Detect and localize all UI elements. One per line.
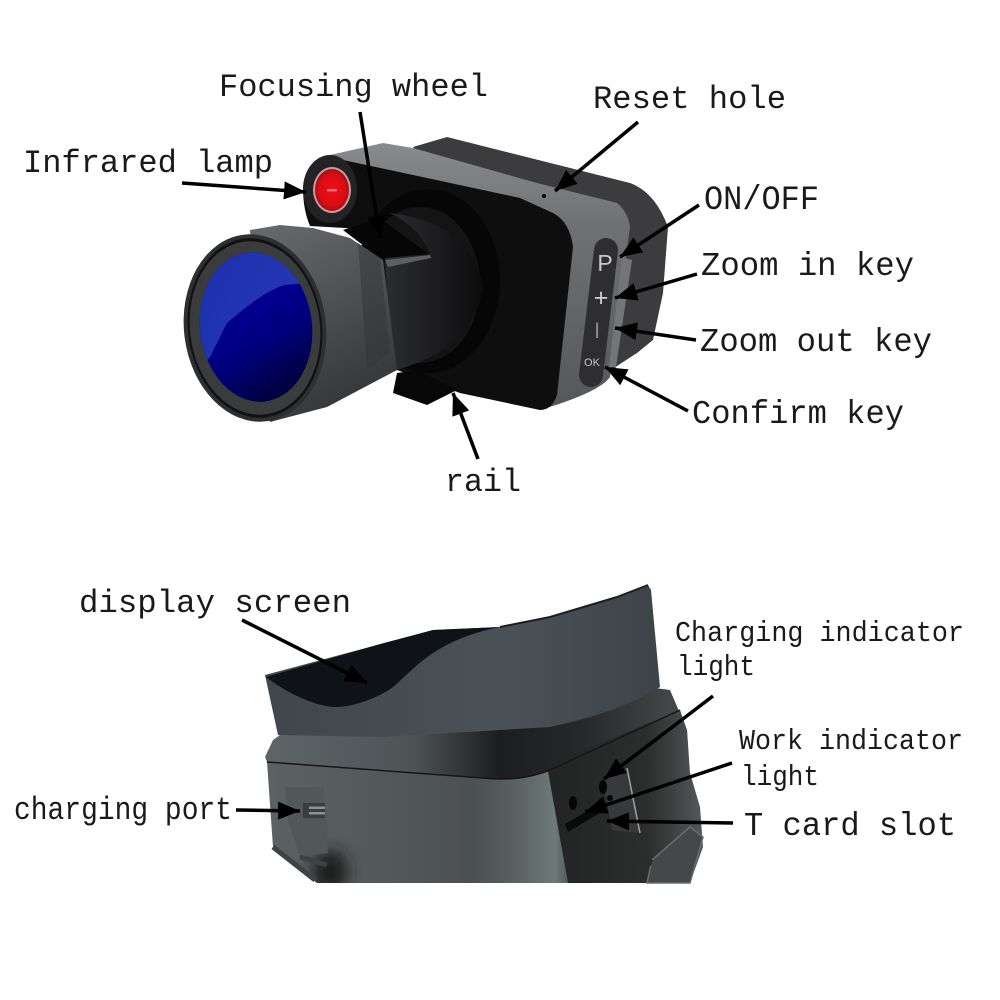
mounting clip left	[273, 847, 327, 880]
lower body band	[265, 688, 690, 790]
label: T card slot: T card slot	[744, 808, 956, 845]
barrel dark band	[358, 243, 390, 370]
arrow: rail	[453, 393, 478, 459]
label: charging indicator light line 2: light	[677, 651, 755, 684]
camera front face	[303, 160, 573, 410]
arrow: confirm	[605, 367, 688, 411]
barrel	[250, 225, 397, 422]
label: reset hole: Reset hole	[593, 81, 786, 118]
tube	[385, 213, 483, 372]
arrow: charging indicator	[604, 696, 713, 779]
button labels	[584, 250, 613, 369]
hood top rim	[500, 585, 648, 627]
label: on/off: ON/OFF	[704, 182, 819, 220]
side plate	[603, 768, 640, 833]
button labels: P	[597, 250, 613, 276]
button labels: +	[594, 284, 608, 312]
front face	[267, 762, 568, 883]
focus wheel sliver	[385, 255, 431, 267]
port recess	[285, 787, 328, 857]
reset hole	[542, 194, 546, 198]
camera rear housing	[413, 137, 668, 385]
button labels: OK	[584, 357, 601, 369]
arrow: infrared lamp	[182, 183, 306, 192]
label: display screen: display screen	[79, 585, 351, 622]
arrow: zoom out	[615, 328, 696, 340]
T card slot	[565, 804, 603, 832]
device: rear view with display hood	[265, 585, 703, 894]
infrared lamp	[303, 155, 357, 223]
rail	[393, 370, 457, 405]
body seam line	[267, 710, 680, 779]
label: confirm key: Confirm key	[692, 396, 904, 433]
arrow: T card slot	[607, 821, 733, 823]
label: zoom in key: Zoom in key	[701, 248, 914, 285]
button labels: I	[594, 318, 600, 343]
label: charging port: charging port	[14, 792, 232, 829]
label: focusing wheel: Focusing wheel	[219, 69, 488, 106]
arrow: zoom in	[615, 274, 697, 298]
blue lens	[200, 252, 312, 402]
arrow: work indicator	[585, 763, 732, 812]
hood outer	[265, 585, 660, 737]
button strip	[591, 250, 606, 375]
arrow: charging port	[236, 810, 300, 811]
side plate edge	[627, 768, 640, 833]
camera top and side face	[330, 143, 630, 410]
port shadow	[312, 850, 348, 894]
hood opening	[266, 627, 500, 707]
label: rail: rail	[445, 464, 521, 501]
mounting clip right	[630, 855, 652, 863]
indicator lights	[569, 780, 613, 810]
side face	[530, 710, 703, 883]
side buttons	[609, 257, 632, 367]
focusing wheel slot	[343, 218, 430, 262]
lens mount ring	[356, 189, 500, 373]
arrow: focusing wheel	[360, 112, 380, 238]
lens rim	[173, 226, 337, 430]
label: zoom out key: Zoom out key	[700, 324, 932, 361]
lower right flap	[647, 827, 703, 883]
label: charging indicator light: Charging indicator	[675, 617, 964, 650]
arrow: reset hole	[555, 122, 638, 191]
label: work indicator light line 2: light	[741, 761, 819, 794]
arrow: on/off	[620, 205, 699, 257]
arrow: display screen	[242, 620, 367, 683]
device: night vision camera front view	[173, 137, 668, 430]
charging port	[303, 803, 325, 818]
label: infrared lamp: Infrared lamp	[23, 145, 273, 182]
label: work indicator light: Work indicator	[739, 725, 963, 758]
